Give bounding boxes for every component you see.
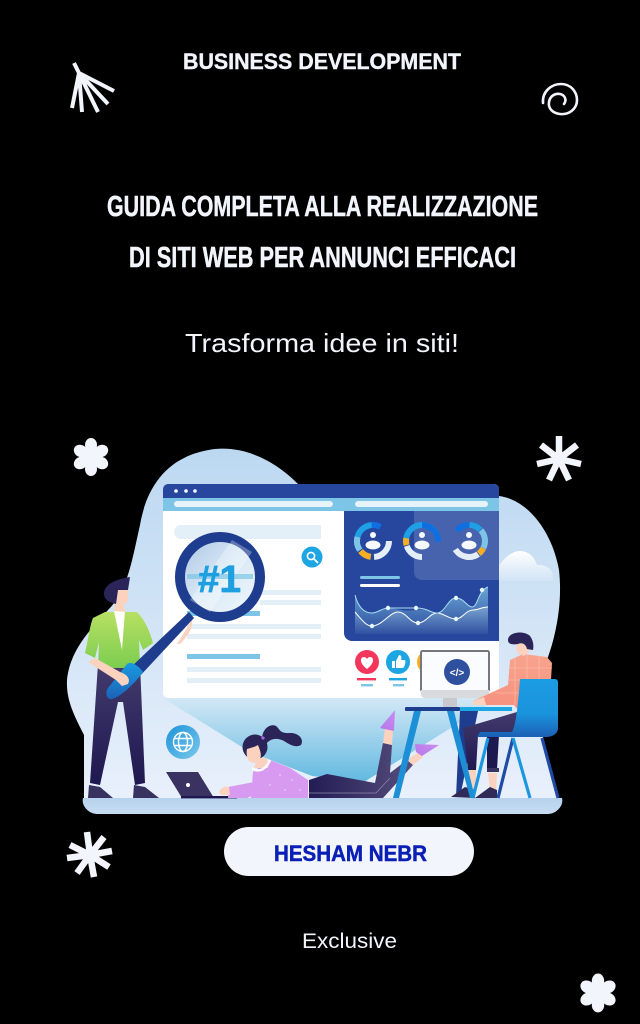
legs <box>309 743 413 798</box>
chair <box>477 679 558 737</box>
browser window <box>163 484 499 698</box>
heading: business development: BUSINESS DEVELOPMENT <box>183 49 462 74</box>
magnifier grip <box>106 663 143 699</box>
sweater <box>251 760 308 798</box>
hair <box>242 734 268 760</box>
hair <box>104 577 130 604</box>
magnifier lens <box>180 537 260 617</box>
hand <box>177 620 192 644</box>
trousers <box>463 712 520 770</box>
collar <box>252 760 270 770</box>
person: standing man with magnifier <box>85 537 260 798</box>
donut chart 3 <box>446 518 492 564</box>
far leg and skin <box>487 735 499 770</box>
donut chart 1 <box>351 519 395 563</box>
icon: asterisk decoration bottom left <box>67 832 112 877</box>
donut avatars <box>366 532 476 550</box>
title <box>107 191 538 274</box>
name badge <box>224 827 474 876</box>
shirt and arm <box>473 654 552 712</box>
legend lines <box>360 576 400 587</box>
magnifier label: #1 <box>198 559 241 601</box>
title: DI SITI WEB PER ANNUNCI EFFICACI <box>129 242 516 274</box>
icon: burst decoration <box>72 63 114 112</box>
shirt <box>114 611 125 650</box>
icon: flower decoration top left <box>72 438 110 476</box>
icon: orange reaction <box>417 650 441 674</box>
hand on grip <box>88 658 129 686</box>
address bar <box>163 498 499 511</box>
neck <box>254 758 268 768</box>
feet <box>383 728 423 765</box>
ground platform <box>83 798 562 814</box>
donut chart 2 <box>402 521 442 561</box>
window body <box>163 484 499 698</box>
desk <box>393 707 512 798</box>
face <box>247 745 261 763</box>
purple shoes <box>380 710 439 756</box>
icon: globe <box>166 725 200 759</box>
illustration: website development scene <box>67 449 562 814</box>
computer monitor <box>421 651 489 707</box>
trousers <box>90 664 145 785</box>
sweater dots <box>269 774 301 791</box>
sweater <box>85 612 153 668</box>
desk front leg <box>447 711 475 798</box>
text lines <box>187 590 321 683</box>
laptop <box>166 772 237 798</box>
face <box>516 642 529 656</box>
magnifier handle <box>130 612 194 677</box>
hair tie <box>261 736 265 740</box>
icon: search button <box>302 546 322 568</box>
icon: heart reaction <box>355 650 379 686</box>
background blob <box>67 449 560 798</box>
face and neck <box>114 588 128 612</box>
label: exclusive: Exclusive <box>302 930 397 953</box>
subtitle: Trasforma idee in siti! <box>185 328 459 358</box>
window dots <box>174 489 197 493</box>
shoes <box>88 785 159 798</box>
hair <box>508 633 533 650</box>
icon: spiral decoration <box>543 84 577 114</box>
icon: thumbs up reaction <box>386 650 410 686</box>
analytics panel <box>344 511 499 641</box>
window title bar <box>163 484 499 498</box>
hand <box>219 787 230 795</box>
chair legs <box>473 738 558 798</box>
ponytail <box>262 725 302 746</box>
icon: asterisk decoration top right <box>537 436 581 480</box>
cloud <box>499 551 553 581</box>
person: seated man at desk <box>451 633 558 798</box>
area chart <box>355 587 488 634</box>
computer monitor: </> <box>450 668 464 679</box>
icon: flower decoration bottom right <box>578 974 618 1012</box>
shoes <box>451 787 497 798</box>
person: woman lying with laptop <box>219 710 439 798</box>
light beam below the window <box>163 698 499 782</box>
name badge: HESHAM NEBR <box>274 841 427 866</box>
search bar <box>174 525 321 539</box>
